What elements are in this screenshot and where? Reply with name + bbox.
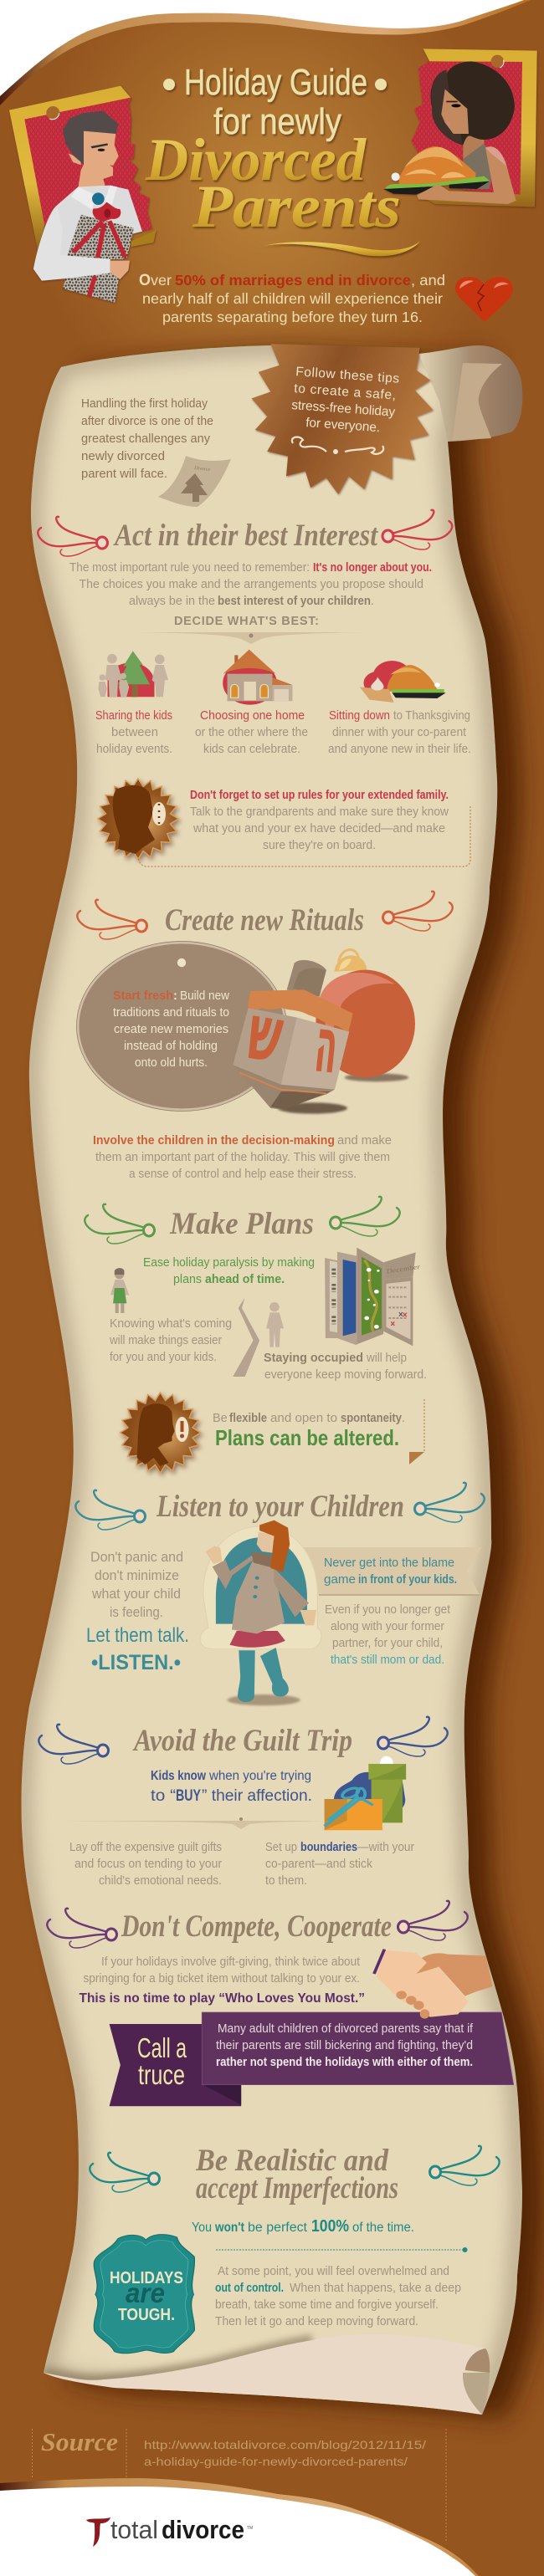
text: gift-giving — [79, 1955, 365, 2006]
text: ease holiday paralysis: plans — [173, 1273, 202, 1286]
intro statistic: , and — [411, 272, 445, 289]
icon: handshake — [374, 1950, 493, 2019]
figure: man — [266, 1302, 284, 1347]
section 3: make plans — [85, 1197, 427, 1473]
heading: Create new Rituals — [165, 903, 364, 938]
title line: Divorced Parents — [145, 126, 420, 256]
icon: calendar — [325, 1248, 421, 1346]
text: at some point: breath, take some time and forgive yourself. — [215, 2298, 439, 2312]
text: set up boundaries: Set up — [265, 1841, 297, 1854]
round tag: create new memories — [114, 1023, 228, 1036]
heading flourishes — [90, 2146, 500, 2192]
source block: Source — [41, 2427, 118, 2456]
text: kids know — [151, 1769, 312, 1805]
lead text — [69, 561, 432, 608]
captions: or the other where the — [195, 726, 308, 739]
intro statistic: nearly half of all children will experience their — [142, 290, 443, 307]
icon: ornament and dreidel: ש — [241, 986, 290, 1081]
callout: extended family: Don't forget to set up rules for your extended family. — [190, 789, 449, 802]
intro statistic: O — [139, 272, 151, 289]
icon: ornament and dreidel — [233, 950, 415, 1114]
text block: involve the children: and make — [337, 1134, 392, 1147]
figure: woman in green skirt — [110, 1268, 129, 1313]
heading: Avoid the Guilt Trip — [132, 1724, 352, 1758]
text: lay off: child's emotional needs. — [99, 1874, 222, 1888]
section 2: create new rituals — [77, 892, 453, 1181]
text: even if: that's still mom or dad. — [331, 1653, 444, 1667]
callout: be flexible: Plans can be altered. — [215, 1425, 399, 1450]
badge: man speaking — [98, 779, 178, 859]
text: knowing what's coming — [109, 1317, 232, 1364]
section 4: listen to your children — [75, 1483, 485, 1705]
banner: call a truce — [110, 2012, 514, 2106]
banner text: truce — [138, 2059, 185, 2090]
heading: Don't Compete, Cooperate — [121, 1909, 392, 1944]
heading flourishes — [38, 510, 452, 556]
seal: follow these tips: for everyone. — [305, 416, 381, 435]
intro statistic — [139, 272, 445, 325]
intro text block: parent will face. — [81, 467, 167, 481]
text: you won't be perfect: won't — [214, 2221, 244, 2235]
text: knowing what's coming: will make things easier — [109, 1334, 222, 1347]
logo: total divorce: divorce — [162, 2515, 244, 2544]
section 7: be realistic — [90, 2144, 500, 2354]
divider — [63, 1817, 322, 1829]
section 5: avoid the guilt trip — [38, 1717, 448, 1888]
captions: to Thanksgiving — [393, 709, 470, 723]
heading — [195, 2144, 398, 2205]
illustration: girl — [200, 1521, 321, 1705]
callout: extended family: sure they're on board. — [263, 839, 376, 852]
banner text: Call a — [137, 2032, 187, 2063]
captions: Choosing one home — [200, 709, 305, 723]
icon: gifts — [325, 1756, 406, 1830]
text: at some point: When that happens, take a deep — [290, 2282, 461, 2295]
text: kids know: BUY — [176, 1787, 201, 1805]
text: you won't be perfect: be perfect — [248, 2221, 308, 2235]
text block: involve the children: Involve the children in the decision-making — [93, 1134, 335, 1147]
panel: parchment scroll — [22, 345, 522, 2415]
heading flourishes — [38, 1717, 448, 1764]
seal: follow these tips: Follow these tips — [295, 365, 400, 386]
badge: holidays are tough: HOLIDAYS — [110, 2269, 183, 2287]
text: knowing what's coming: for you and your kids. — [110, 1351, 217, 1364]
section 6: don't compete, cooperate — [47, 1901, 514, 2106]
text: gift-giving: springing for a big ticket item without talking to your ex. — [84, 1972, 360, 1986]
badge: holidays are tough: are — [126, 2277, 165, 2308]
callout: be flexible: flexible — [229, 1412, 267, 1425]
text: lay off: and focus on tending to your — [74, 1858, 222, 1871]
heading: accept Imperfections — [196, 2171, 398, 2205]
title line: Holiday Guide — [163, 62, 387, 142]
callout: be flexible: spontaneity — [341, 1412, 402, 1425]
callout: extended family: Talk to the grandparents and make sure they know — [190, 805, 449, 819]
seal: follow these tips: to create a safe, — [294, 381, 397, 403]
callout: be flexible: Be — [213, 1412, 228, 1425]
icon: divorce paper with tree: Divorce — [193, 466, 211, 473]
intro text block: Handling the first holiday — [81, 396, 208, 411]
text: kids know: when you're trying — [208, 1769, 311, 1783]
heading: Be Realistic and — [195, 2144, 388, 2178]
icon: calendar: December — [385, 1263, 421, 1275]
text: kids know: ” their affection. — [202, 1787, 312, 1805]
text: set up boundaries: boundaries — [300, 1841, 357, 1854]
text: you won't be perfect — [192, 2217, 414, 2236]
lead text: The most important rule you need to remember: — [69, 561, 310, 575]
text: knowing what's coming: Knowing what's coming — [110, 1317, 232, 1331]
title line: Holiday Guide: Holiday Guide — [184, 62, 367, 103]
icons row — [98, 650, 446, 705]
text: set up boundaries: —with your — [357, 1841, 414, 1854]
icon: family and tree — [98, 651, 168, 697]
round tag: Start fresh — [113, 989, 173, 1003]
round tag: instead of holding — [124, 1040, 218, 1053]
title line: Holiday Guide: for newly — [213, 101, 341, 142]
round tag: traditions and rituals to — [113, 1006, 229, 1020]
banner text — [137, 2022, 474, 2090]
round tag: Build new — [180, 989, 229, 1003]
text: you won't be perfect: You — [192, 2221, 212, 2235]
seal: follow these tips: stress-free holiday — [291, 398, 396, 420]
captions: Sitting down — [329, 709, 390, 723]
text: staying occupied: everyone keep moving forward. — [264, 1368, 427, 1382]
callout: be flexible: . — [402, 1412, 405, 1425]
heading flourishes — [85, 1197, 400, 1244]
text: staying occupied: will help — [366, 1352, 407, 1365]
title line: Divorced Parents: Divorced — [145, 126, 367, 193]
text: even if: Even if you no longer get — [325, 1603, 450, 1617]
round tag: onto old hurts. — [135, 1056, 208, 1070]
heading: Act in their best Interest — [113, 519, 378, 553]
text: at some point: Then let it go and keep moving forward. — [215, 2315, 418, 2328]
ribbon text — [319, 1556, 480, 1595]
round tag — [77, 942, 286, 1111]
text: don't panic: Let them talk. — [86, 1624, 189, 1647]
text: you won't be perfect: of the time. — [352, 2221, 414, 2235]
callout: extended family: what you and your ex have decided—and make — [192, 822, 445, 836]
intro statistic: 50% of marriages end in divorce — [175, 272, 411, 289]
text: kids know: Kids know — [151, 1769, 207, 1783]
ribbon text: in front of your kids. — [358, 1573, 457, 1587]
intro text block: after divorce is one of the — [81, 414, 213, 428]
captions: dinner with your co-parent — [332, 726, 466, 739]
lead text: It's no longer about you. — [313, 561, 432, 575]
title line: Divorced Parents: Parents — [192, 173, 401, 240]
text: ease holiday paralysis — [143, 1256, 315, 1286]
text: lay off — [69, 1841, 222, 1888]
banner text: Many adult children of divorced parents say that if — [218, 2022, 474, 2036]
text: staying occupied — [264, 1352, 427, 1382]
icon: broken heart — [455, 277, 513, 322]
intro text block — [81, 396, 213, 481]
intro text block: newly divorced — [81, 449, 165, 463]
text: set up boundaries — [265, 1841, 414, 1888]
captions: kids can celebrate. — [203, 743, 300, 756]
lead text: The choices you make and the arrangements you propose should — [79, 578, 423, 591]
heading: Listen to your Children — [156, 1490, 404, 1524]
icon: divorce paper with tree — [158, 456, 231, 507]
text: gift-giving: If your holidays involve gift-giving, think twice about — [101, 1955, 360, 1969]
ribbon text: game — [324, 1573, 356, 1587]
callout: extended family — [138, 789, 470, 866]
intro text block: greatest challenges any — [81, 432, 210, 446]
text block: involve the children: a sense of control and help ease their stress. — [129, 1168, 357, 1181]
dotted rule — [216, 2247, 467, 2252]
badge: woman with exclamation — [121, 1393, 201, 1473]
text: even if: partner, for your child, — [332, 1637, 443, 1650]
text: don't panic: •LISTEN.• — [91, 1651, 181, 1674]
ribbon — [300, 1547, 482, 1595]
text: don't panic — [86, 1549, 189, 1674]
text: don't panic: is feeling. — [110, 1604, 163, 1620]
text: don't panic: don't minimize — [95, 1567, 179, 1583]
illustration: father with gift in torn frame — [9, 86, 157, 303]
source block: a-holiday-guide-for-newly-divorced-parents/ — [144, 2455, 408, 2468]
intro statistic: parents separating before they turn 16. — [162, 309, 423, 325]
text block: involve the children — [93, 1134, 392, 1181]
text: ease holiday paralysis: ahead of time. — [205, 1273, 285, 1286]
text: even if — [325, 1603, 450, 1667]
text: don't panic: Don't panic and — [90, 1549, 183, 1565]
text: at some point: At some point, you will feel overwhelmed and — [218, 2265, 449, 2278]
heading flourishes — [75, 1483, 485, 1530]
ribbon text: Never get into the blame — [324, 1556, 454, 1570]
icon: turkey and pie — [360, 661, 446, 703]
badge: holidays are tough — [94, 2235, 195, 2354]
captions: and anyone new in their life. — [328, 743, 471, 756]
logo: total divorce — [86, 2515, 253, 2547]
text: ease holiday paralysis: Ease holiday paralysis by making — [143, 1256, 315, 1270]
text: set up boundaries: co-parent—and stick — [265, 1858, 373, 1871]
intro statistic: ver — [151, 272, 172, 289]
lead text: best interest of your children — [218, 595, 371, 608]
scroll bottom curl — [44, 2334, 490, 2415]
source block — [32, 2427, 446, 2541]
icon: house — [223, 650, 293, 705]
chevron — [233, 1298, 259, 1377]
text: at some point: out of control. — [215, 2282, 284, 2295]
badge: holidays are tough: TOUGH. — [118, 2306, 175, 2324]
text: don't panic: what your child — [91, 1586, 181, 1602]
title — [145, 62, 420, 256]
callout: be flexible: and open to — [270, 1412, 337, 1425]
lead text: . — [371, 595, 374, 608]
heading: Make Plans — [169, 1207, 314, 1241]
icon: ornament and dreidel: ה — [311, 1000, 342, 1091]
subheading: decide what's best: DECIDE WHAT'S BEST: — [174, 615, 319, 628]
text: even if: along with your former — [331, 1620, 444, 1633]
captions: Sharing the kids — [95, 709, 172, 723]
banner text: rather not spend the holidays with either of them. — [216, 2056, 473, 2069]
text: lay off: Lay off the expensive guilt gifts — [69, 1841, 222, 1854]
callout: be flexible — [213, 1399, 424, 1464]
text: kids know: to “ — [151, 1787, 176, 1805]
heading flourishes — [47, 1901, 468, 1948]
text block: involve the children: them an important part of the holiday. This will give them — [95, 1151, 390, 1164]
text: staying occupied: Staying occupied — [264, 1352, 363, 1365]
section 1: act in their best interest — [38, 510, 471, 866]
lead text: always be in the — [129, 595, 215, 608]
banner text: their parents are still bickering and fighting, they'd — [216, 2039, 473, 2052]
captions: holiday events. — [96, 743, 172, 756]
scroll roll top right — [418, 345, 522, 442]
seal: follow these tips — [252, 344, 433, 494]
scroll shadow — [45, 350, 544, 2420]
text: set up boundaries: to them. — [265, 1874, 307, 1888]
logo: total divorce: total — [110, 2515, 158, 2544]
logo: total divorce: TM — [247, 2526, 253, 2531]
divider — [137, 632, 366, 644]
captions — [95, 709, 471, 756]
heading flourishes — [77, 892, 453, 939]
text: you won't be perfect: 100% — [311, 2217, 349, 2236]
text: gift-giving: This is no time to play “Who Loves You Most.” — [79, 1991, 365, 2006]
captions: between — [111, 726, 158, 739]
text: at some point — [215, 2265, 461, 2328]
source block: http://www.totaldivorce.com/blog/2012/11/15/ — [144, 2438, 426, 2451]
figures and chevron — [110, 1248, 421, 1377]
illustration: mother with turkey in torn frame — [383, 49, 537, 207]
round tag: : — [173, 989, 177, 1003]
